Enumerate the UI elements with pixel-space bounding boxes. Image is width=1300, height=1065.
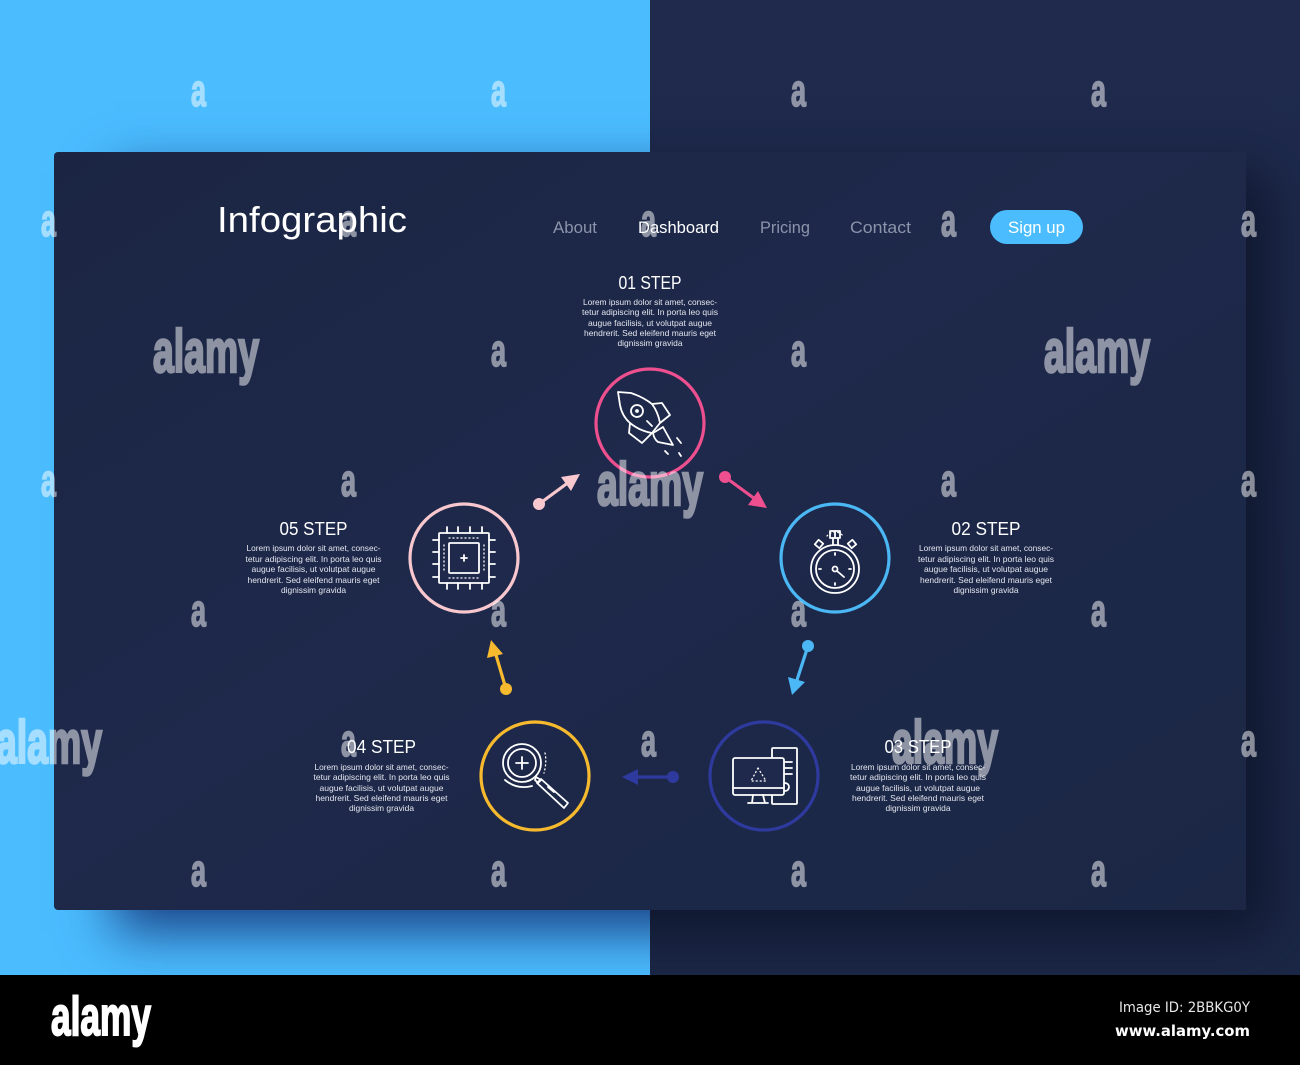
step 5 text (246, 519, 382, 595)
step 4 ring (481, 722, 589, 830)
step 5 text: hendrerit. Sed eleifend mauris eget (248, 575, 380, 585)
watermark: small letters: a (941, 195, 957, 246)
step 5 text: augue facilisis, ut volutpat augue (252, 564, 376, 574)
watermark: small letters: a (1241, 195, 1257, 246)
watermark: small letters: a (491, 585, 507, 636)
step 4 text (314, 737, 450, 813)
navigation menu: About (553, 218, 597, 237)
step 4 text: 04 STEP (347, 737, 416, 757)
watermark: small letters: a (191, 585, 207, 636)
step 4 text: tetur adipiscing elit. In porta leo quis (314, 772, 450, 782)
step 1 text: tetur adipiscing elit. In porta leo quis (582, 307, 718, 317)
watermark: small letters: a (791, 65, 807, 116)
watermark: small letters: a (41, 455, 57, 506)
step 4 text: Lorem ipsum dolor sit amet, consec- (314, 762, 449, 772)
arrow: step 4 to step 5 (487, 640, 512, 695)
step 5 text: Lorem ipsum dolor sit amet, consec- (246, 543, 381, 553)
step 3 ring (710, 722, 818, 830)
watermark: small letters: a (491, 845, 507, 896)
icon: stopwatch (811, 531, 859, 593)
panel: main card (54, 152, 1246, 910)
step 2 text: augue facilisis, ut volutpat augue (924, 564, 1048, 574)
watermark: small letters: a (641, 195, 657, 246)
step 5 text: tetur adipiscing elit. In porta leo quis (246, 554, 382, 564)
icon: desktop computer (733, 748, 797, 804)
step 2 ring (781, 504, 889, 612)
step 5 text: dignissim gravida (281, 585, 346, 595)
step 3 text: Lorem ipsum dolor sit amet, consec- (851, 762, 985, 772)
navigation menu: Pricing (760, 218, 810, 237)
step 3 text: hendrerit. Sed eleifend mauris eget (852, 793, 985, 803)
watermark: small letters: a (1091, 65, 1107, 116)
navigation menu (553, 218, 911, 237)
watermark: large logos: alamy (892, 709, 998, 776)
step 4 text: hendrerit. Sed eleifend mauris eget (316, 793, 448, 803)
step 2 text: hendrerit. Sed eleifend mauris eget (920, 575, 1053, 585)
icon: microchip (433, 527, 495, 589)
watermark: small letters: a (791, 585, 807, 636)
icon: rocket (618, 392, 681, 456)
step 1 ring (596, 369, 704, 477)
watermark: small letters (41, 65, 1257, 896)
step 4 text: dignissim gravida (349, 803, 414, 813)
watermark: small letters: a (1241, 715, 1257, 766)
step 1 text: 01 STEP (618, 273, 682, 293)
step 2 text: dignissim gravida (954, 585, 1019, 595)
navigation menu: Dashboard (638, 218, 719, 237)
footer bar (0, 975, 1300, 1065)
watermark: small letters: a (341, 715, 357, 766)
sign up button: Sign up (1008, 218, 1065, 237)
step 1 text (582, 273, 718, 348)
background: navy half (650, 0, 1300, 975)
watermark: small letters: a (1091, 845, 1107, 896)
step 4 text: augue facilisis, ut volutpat augue (320, 783, 444, 793)
footer bar: www.alamy.com (1115, 1022, 1250, 1040)
watermark: small letters: a (941, 455, 957, 506)
step 1 text: augue facilisis, ut volutpat augue (588, 318, 712, 328)
watermark: small letters: a (191, 845, 207, 896)
step 5 ring (410, 504, 518, 612)
icon: magnifier (503, 744, 568, 808)
watermark: small letters: a (491, 325, 507, 376)
watermark: small letters: a (41, 195, 57, 246)
watermark: small letters: a (341, 455, 357, 506)
watermark: small letters: a (791, 845, 807, 896)
step 3 text (850, 737, 986, 813)
step 2 text (918, 519, 1054, 595)
arrow: step 5 to step 1 (533, 474, 580, 510)
step 1 text: Lorem ipsum dolor sit amet, consec- (583, 297, 717, 307)
arrow: step 3 to step 4 (622, 769, 679, 785)
watermark: small letters: a (1241, 455, 1257, 506)
step 2 text: 02 STEP (952, 519, 1020, 539)
watermark: small letters: a (641, 715, 657, 766)
step 2 text: tetur adipiscing elit. In porta leo quis (918, 554, 1054, 564)
footer bar: alamy (51, 985, 151, 1047)
watermark: large logos (0, 318, 1150, 776)
watermark: small letters: a (191, 65, 207, 116)
step 1 text: hendrerit. Sed eleifend mauris eget (584, 328, 717, 338)
footer bar: Image ID: 2BBKG0Y (1119, 1000, 1250, 1016)
step 2 text: Lorem ipsum dolor sit amet, consec- (919, 543, 1053, 553)
watermark: small letters: a (791, 325, 807, 376)
watermark: large logos: alamy (0, 709, 102, 776)
watermark: small letters: a (491, 65, 507, 116)
watermark: small letters: a (1091, 585, 1107, 636)
step 3 text: augue facilisis, ut volutpat augue (856, 783, 980, 793)
watermark: large logos: alamy (153, 318, 259, 385)
sign up button (990, 210, 1083, 244)
arrow: step 1 to step 2 (719, 471, 767, 508)
navigation menu: Contact (850, 218, 911, 237)
arrow: step 2 to step 3 (788, 640, 814, 695)
step 3 text: dignissim gravida (886, 803, 951, 813)
step 3 text: 03 STEP (884, 737, 952, 757)
step 3 text: tetur adipiscing elit. In porta leo quis (850, 772, 986, 782)
watermark: large logos: alamy (597, 451, 703, 518)
background: blue half (0, 0, 650, 975)
step 5 text: 05 STEP (280, 519, 348, 539)
watermark: small letters: a (341, 195, 357, 246)
title: Infographic (217, 199, 407, 240)
step 1 text: dignissim gravida (618, 338, 683, 348)
watermark: large logos: alamy (1044, 318, 1150, 385)
